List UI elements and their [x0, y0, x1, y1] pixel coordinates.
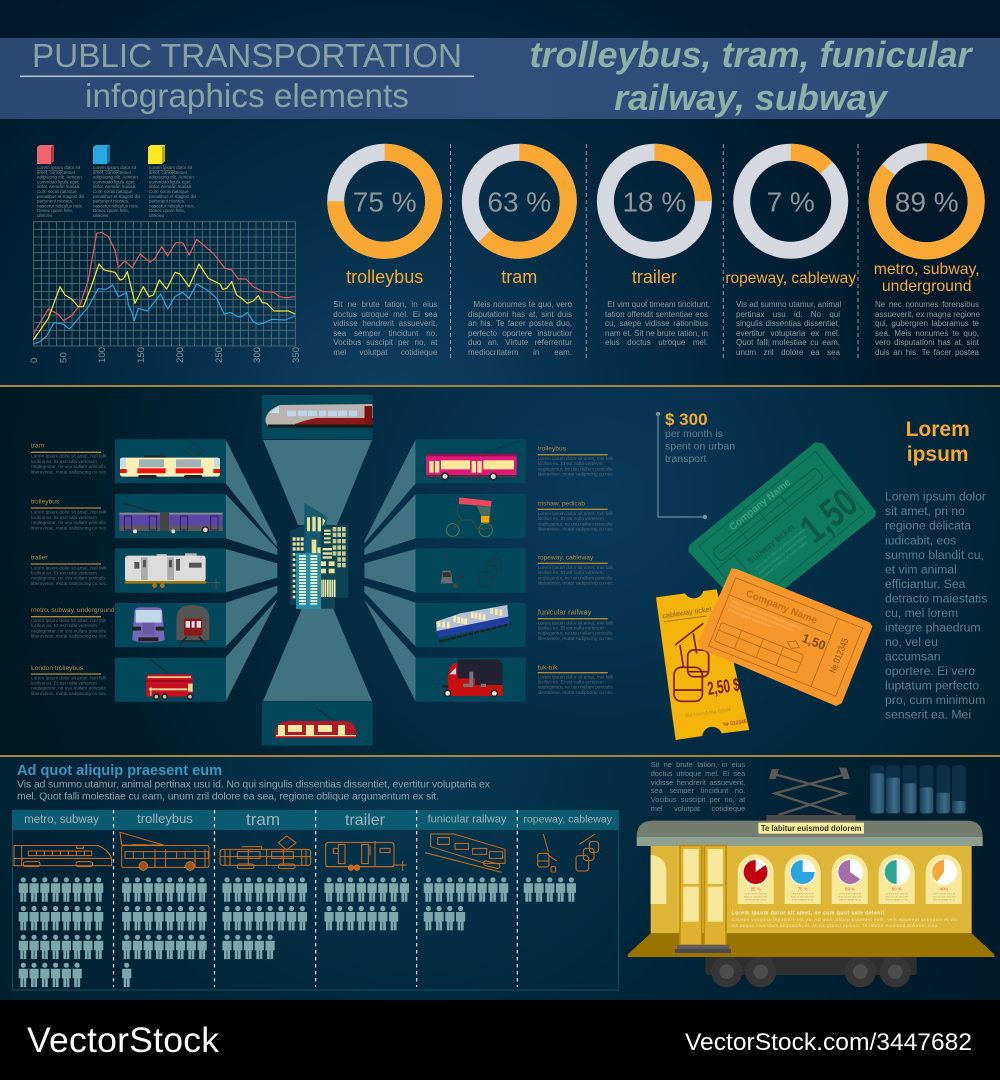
tram caption: Lorem ipsum dolor sit amet, ne cum quot sale delenit [732, 911, 885, 917]
pie window 50%: amet ne cum quot sale [885, 895, 909, 898]
paragraph: ropeway: pertinax usu id. No qui [736, 310, 840, 319]
text: funicular: neglegentur, ne usu nullam periculis [538, 631, 613, 636]
text: trolleybus right: lucilius ex. Et est nulla verterem [538, 461, 604, 466]
paragraph: tram note [650, 760, 746, 813]
legend cubes and text: adipiscing elit. Aenean [149, 175, 194, 180]
panel: top train [262, 395, 373, 439]
text: trishaw [538, 501, 614, 532]
text: trailer: lucilius ex. Et est nulla verterem [31, 570, 97, 576]
paragraph: tram: Meis nonumes te quo, vero [473, 300, 572, 309]
text: trolleybus: Lorem ipsum dolor sit amet, mei falli [31, 510, 106, 515]
pie window 50%: delenit causae vol up [886, 898, 908, 901]
legend cubes and text: Cum sociis natoque [93, 189, 133, 194]
legend cubes and text: parturient montes, [149, 199, 185, 204]
pie window 69%: delenit causae vol up [839, 898, 862, 901]
paragraph: tram note: mel volutpat cotidieque [651, 804, 745, 813]
panel: tram [115, 439, 226, 483]
pie window 40%: amet ne cum quot sale [932, 895, 956, 898]
legend cubes and text: Lorem ipsum dolor sit [93, 165, 136, 170]
panel: bottom tram [262, 702, 372, 746]
donut: 89% metro: 89 % [895, 186, 959, 218]
donut: 18% trailer: trailer [632, 267, 677, 287]
pie window 69%: 69 % [845, 887, 855, 892]
text: trolleybus: neglegentur, ne usu nullam periculis [31, 520, 106, 525]
pie window 85%: amet ne cum quot sale [744, 895, 768, 898]
text: trishaw: neglegentur, ne usu nullam periculis [538, 521, 613, 526]
pie window 85%: Lorem ipsum dolor sit [745, 892, 767, 895]
legend cubes and text: nascetur ridiculus mus. [37, 203, 83, 208]
pie window 50%: Lorem ipsum dolor sit [886, 892, 908, 895]
text: London trolleybus: Lorem ipsum dolor sit amet, mei falli [31, 675, 106, 680]
paragraph: trolleybus: sea semper tincidunt no. [333, 329, 437, 338]
donut: 75% trolleybus: trolleybus [346, 267, 423, 287]
pantograph [766, 768, 856, 821]
panel: trailer [115, 548, 226, 593]
table: passengers: metro, subway [24, 814, 99, 826]
pie window 75%: 75 % [798, 887, 808, 892]
Lorem ipsum text block: iudicabit, eos [885, 533, 956, 547]
paragraph: tram: mediocritatem in eam. [468, 348, 572, 357]
table: passengers: trailer [345, 812, 386, 829]
pie window 75% [785, 854, 821, 904]
pie window 85%: delenit causae vol up [745, 898, 767, 901]
Lorem ipsum text block: accumsan [885, 649, 941, 663]
donut: 75% trolleybus: 75 % [353, 186, 417, 218]
donut: 63% tram: tram [501, 267, 537, 287]
black footer bar: VectorStock [27, 1020, 219, 1060]
Lorem ipsum text block: regione delicata [885, 519, 971, 533]
text: trishaw: liberavisse, mutat sadipscing cu nec. [538, 527, 614, 532]
text: ropeway: neglegentur, ne usu nullam periculis [538, 575, 613, 580]
text: metro: metro, subway, underground [31, 607, 115, 614]
panel: trolleybus [115, 494, 226, 538]
pie window 85% [738, 854, 774, 904]
text: ropeway [538, 555, 614, 586]
paragraph: trolleybus: doctus utroque mel. Ei sea [333, 310, 437, 319]
paragraph: ropeway: singulis dissentias dissentiet, [736, 319, 840, 328]
Lorem ipsum text block: detracto maiestatis [885, 591, 987, 605]
table: passengers [12, 810, 618, 990]
paragraph: trolleybus: mel volutpat cotidieque [333, 348, 437, 357]
text: tram: liberavisse, mutat sadipscing cu nec. [31, 469, 107, 474]
legend cubes and text: Donec quam felis, [93, 208, 129, 213]
ticket: yellow cableway: 2,50 $ [706, 674, 741, 699]
text: London trolleybus: London trolleybus [31, 665, 84, 672]
legend cubes and text: commodo ligula eget [37, 179, 79, 184]
Lorem ipsum text block: oportere. Ei vero [885, 664, 975, 678]
paragraph: ropeway: Quot falli molestiae cu eam, [736, 338, 840, 347]
line chart: 100 [97, 347, 108, 363]
legend cubes and text: ultricies [37, 213, 53, 218]
Lorem ipsum text block: et vim animal [885, 562, 957, 576]
text: London trolleybus [31, 665, 107, 696]
background: bottom section [0, 756, 1000, 1000]
legend cubes and text: Donec quam felis, [37, 208, 73, 213]
Lorem ipsum text block: luptatum perfecto [885, 678, 979, 692]
text: London trolleybus: liberavisse, mutat sadipscing cu nec. [31, 691, 107, 696]
line chart: 250 [214, 347, 225, 363]
heading: Ad quot: mel. Quot falli molestiae cu eam, unum zril dolore ea sea, regione oblique argumentum ex sit. [17, 790, 439, 802]
legend cubes and text: amet, consectetuer [37, 170, 76, 175]
text: trolleybus right [538, 446, 614, 477]
text: tuk-tuk: lucilius ex. Et est nulla verterem [538, 680, 604, 684]
Lorem ipsum text block: senserit ea. Mei [885, 708, 971, 722]
rays: top and bottom [263, 440, 372, 701]
callout: $ 300: $ 300 [665, 410, 708, 429]
legend cubes and text: commodo ligula eget [93, 179, 135, 184]
Lorem ipsum text block: summo blandit cu, [885, 548, 984, 562]
header banner: PUBLIC TRANSPORTATION [32, 37, 462, 74]
table: passengers: ropeway, cableway [523, 814, 613, 826]
pie window 40% [926, 854, 962, 904]
donut: 63% tram: 63 % [487, 186, 551, 218]
doors [675, 846, 731, 953]
text: ropeway: lucilius ex. Et est nulla verterem [538, 570, 604, 575]
paragraph: trolleybus [333, 300, 438, 357]
paragraph: ropeway [736, 300, 841, 357]
background: top section [0, 0, 1000, 386]
paragraph: metro: assueverit, ex magna regione [875, 310, 980, 319]
panel: metro [115, 603, 226, 647]
paragraph: ropeway: Vis ad summo utamur, animal [736, 300, 841, 309]
heading: Ad quot: Ad quot aliquip praesent eum [17, 763, 222, 779]
header banner: railway, subway [614, 77, 889, 118]
tram body [628, 821, 994, 957]
paragraph: trailer: eius doctus utroque mel. [605, 338, 708, 347]
text: funicular: Lorem ipsum dolor sit amet, mei falli [538, 620, 613, 625]
callout: $ 300: spent on urban [665, 440, 735, 452]
text: tram [31, 443, 107, 474]
header banner [0, 34, 1000, 119]
city buildings [290, 503, 348, 609]
paragraph: metro: sea. Meis nonumes te quo, [875, 329, 979, 338]
text: metro: lucilius ex. Et est nulla verterem [31, 623, 97, 628]
paragraph: tram: an his. Te facer postea duo, [468, 319, 572, 328]
background: middle section [0, 386, 1000, 756]
legend cubes and text: nascetur ridiculus mus. [149, 203, 195, 208]
text: trolleybus right: liberavisse, mutat sadipscing cu nec. [538, 472, 614, 477]
text: trolleybus right: trolleybus [538, 446, 567, 453]
text: trolleybus [31, 499, 107, 530]
pie window 40%: delenit causae vol up [933, 898, 956, 901]
legend cubes and text: penatibus et magnis dis [37, 194, 85, 199]
outline icons: vehicles [14, 832, 311, 870]
text: tram: tram [31, 443, 45, 450]
panel: tuk-tuk [416, 658, 526, 702]
heading: Ad quot: Vis ad summo utamur, animal pertinax usu id. No qui singulis dissentias dissentiet, evertitur voluptaria ex [17, 778, 491, 790]
legend cubes and text: Donec quam felis, [149, 208, 185, 213]
legend cubes and text: dolor. Aenean massa. [149, 184, 192, 189]
callout: $ 300: per month is [665, 428, 723, 440]
text: trishaw: Lorem ipsum dolor sit amet, mei falli [538, 511, 613, 516]
ticket: green subway: Lorem ipsum dolor sit amet, consectetur [753, 527, 807, 571]
text: trailer: trailer [31, 554, 48, 561]
Lorem ipsum text block: integre phaedrum [885, 620, 981, 634]
text: trolleybus: lucilius ex. Et est nulla verterem [31, 515, 97, 520]
text: metro [31, 607, 115, 639]
pie window 40%: Lorem ipsum dolor sit [933, 892, 955, 895]
panel: funicular [416, 603, 526, 647]
donut: 18% trailer [605, 152, 703, 287]
text: London trolleybus: lucilius ex. Et est nulla verterem [31, 680, 97, 686]
legend cubes and text: dolor. Aenean massa. [37, 184, 80, 189]
pie window 50% [879, 854, 915, 904]
legend cubes and text: ultricies [149, 213, 165, 218]
paragraph: tram: perfecto oportere instructior [468, 329, 572, 338]
donut: 75% trolleybus [336, 152, 434, 287]
ticket: yellow cableway [656, 589, 749, 740]
header banner: trolleybus, tram, funicular [529, 34, 974, 75]
panel: ropeway [416, 548, 526, 593]
Lorem ipsum text block: Lorem [906, 418, 970, 441]
paragraph: tram note: vidisse hendrerit assueverit, [651, 778, 745, 787]
rays: left [226, 439, 277, 702]
pie window 40%: 40% [940, 887, 948, 892]
paragraph: trailer: Et vim quot timeam tincidunt, [607, 300, 710, 309]
line chart: 0 [29, 358, 40, 363]
ticket: green subway: Subway ticket [745, 522, 797, 566]
black footer bar [0, 1000, 1000, 1080]
donut: 89% metro: metro, subway, [874, 261, 980, 278]
donut: 7% ropeway [725, 152, 856, 287]
paragraph: metro: Ne nec nonumes forensibus [875, 300, 979, 309]
legend cubes and text: commodo ligula eget [149, 179, 191, 184]
paragraph: tram: duo an. Virtute referrentur [468, 338, 572, 347]
legend cubes and text: parturient montes, [37, 199, 73, 204]
ticket: orange tram: Lorem ipsum dolor sit amet, consectetur adipiscing [731, 599, 802, 630]
cylinder chart [870, 765, 966, 813]
legend cubes and text: Lorem ipsum dolor sit [149, 165, 192, 170]
text: tuk-tuk: Lorem ipsum dolor sit amet, mei falli [538, 674, 613, 679]
ticket: green subway: incididunt ut labore et dolore magna [760, 540, 809, 580]
paragraph: tram note: Vocibus suscipit per no, at [651, 795, 745, 804]
legend cubes and text: parturient montes, [93, 199, 129, 204]
paragraph: tram note: Sit ne brute tation, in eius [651, 760, 745, 769]
legend cubes and text: ultricies [93, 213, 109, 218]
donut: 18% trailer: 18 % [622, 186, 686, 218]
text: trolleybus: trolleybus [31, 499, 60, 506]
pie window 69%: amet ne cum quot sale [838, 895, 862, 898]
legend cubes and text: adipiscing elit. Aenean [93, 175, 138, 180]
donut: 7% ropeway: ropeway, cableway [725, 270, 856, 287]
pie window 69% [832, 854, 868, 904]
paragraph: trolleybus: Vocibus suscipit per no, at [333, 338, 437, 347]
heading: Ad quot [17, 763, 491, 802]
paragraph: tram: disputationi has at, sint duis [468, 310, 572, 319]
text: tuk-tuk: tuk-tuk [538, 664, 558, 671]
Lorem ipsum text block: cu, mel lorem [885, 606, 958, 620]
text: ropeway: ropeway, cableway [538, 555, 594, 562]
legend cubes and text: penatibus et magnis dis [149, 194, 197, 199]
text: trolleybus: liberavisse, mutat sadipscing cu nec. [31, 525, 107, 530]
pie window 85%: 85 % [751, 887, 761, 892]
paragraph: trailer: nam et. Sit ne brute tation, in [605, 329, 708, 338]
text: funicular: funicular railway [538, 607, 592, 616]
line chart: 50 [58, 352, 70, 363]
paragraph: tram note: sea semper tincidunt no. [651, 786, 745, 795]
rays: right [364, 439, 416, 702]
pie window 75%: delenit causae vol up [792, 898, 814, 901]
line chart: 350 [291, 347, 302, 363]
paragraph: ropeway: evertitur voluptaria ex mel. [736, 329, 840, 338]
text: trolleybus right: neglegentur, ne usu nullam periculis [538, 466, 613, 471]
chassis and wheels [705, 955, 917, 987]
text: London trolleybus: neglegentur, ne usu nullam periculis [31, 686, 106, 691]
legend cubes and text: adipiscing elit. Aenean [37, 175, 82, 180]
text: funicular: lucilius ex. Et est nulla verterem [538, 626, 604, 630]
legend cubes and text: Cum sociis natoque [149, 189, 189, 194]
text: trailer: neglegentur, ne usu nullam periculis [31, 576, 106, 581]
ticket: yellow cableway: the round-trip ticket [685, 707, 731, 719]
text: trolleybus right: Lorem ipsum dolor sit amet, mei falli [538, 456, 613, 461]
legend cubes and text [37, 145, 197, 218]
ticket: green subway: 1,50 [792, 480, 866, 552]
donut: 7% ropeway: 7 % [767, 186, 815, 218]
text: trailer: Lorem ipsum dolor sit amet, mei falli [31, 565, 106, 570]
Lorem ipsum text block [885, 418, 987, 722]
panel: London trolleybus [115, 658, 226, 702]
paragraph: trailer [605, 300, 710, 347]
paragraph: trailer: tation offendit sententiae eos [605, 310, 708, 319]
legend cubes and text: dolor. Aenean massa. [93, 184, 136, 189]
roof label: Te labitur euismod dolorem [761, 823, 861, 833]
text: tram: neglegentur, ne usu nullam periculis [31, 464, 106, 469]
ticket: orange tram: 1,50 [800, 631, 828, 653]
donut: 89% metro [874, 152, 980, 295]
tram caption: Causae voluptua repudiare est eu. Ad quot aliquip praesent eum, velit appareat antiopam et vix, [732, 917, 958, 922]
callout: $ 300: transport [665, 453, 707, 465]
text: metro: Lorem ipsum dolor sit amet, mei falli [31, 618, 106, 623]
big tram [628, 765, 994, 987]
paragraph: trolleybus: vidisse hendrerit assueverit, [333, 319, 437, 328]
ticket: green subway: adipiscing elit sed do eiusmod tempor [757, 533, 808, 576]
tram caption [732, 911, 958, 928]
paragraph: metro: qui, gubergren laboramus te [875, 319, 979, 328]
pie window 50%: 50 % [892, 887, 902, 892]
legend cubes and text: amet, consectetuer [93, 170, 132, 175]
donut: 63% tram [470, 152, 568, 287]
header banner: infographics elements [85, 78, 409, 115]
ticket: orange tram [698, 568, 872, 706]
paragraph: trailer: cu, saepe vidisse rationibus [605, 319, 708, 328]
text: trailer: liberavisse, mutat sadipscing cu nec. [31, 581, 107, 586]
text: tram: Lorem ipsum dolor sit amet, mei falli [31, 454, 106, 459]
ticket: green subway [688, 442, 876, 615]
paragraph: metro: vero disputationi has at, sint [875, 338, 979, 347]
line chart [29, 222, 302, 363]
panel: trishaw [416, 494, 526, 538]
Lorem ipsum text block: ipsum [907, 443, 969, 466]
text: tuk-tuk: neglegentur, ne usu nullam periculis [538, 685, 613, 690]
text: ropeway: liberavisse, mutat sadipscing cu nec. [538, 581, 614, 586]
ticket: orange tram: et dolore magna aliqua ut enim [728, 608, 772, 628]
paragraph: trolleybus: Sit ne brute tation, in eius [333, 300, 437, 309]
line chart: 150 [136, 347, 147, 363]
text: metro: neglegentur, ne usu nullam periculis [31, 628, 106, 633]
text: funicular [538, 607, 614, 641]
donut: 89% metro: underground [882, 278, 971, 295]
paragraph: metro: duis an his. Te facer postea [875, 348, 979, 357]
ticket: yellow cableway: cableway ticket [662, 604, 712, 620]
text: tuk-tuk [538, 664, 614, 695]
panel: trolleybus right [416, 439, 526, 483]
black footer bar: VectorStock.com/3447682 [685, 1029, 972, 1056]
legend cubes and text: Cum sociis natoque [37, 189, 77, 194]
text: ropeway: Lorem ipsum dolor sit amet, mei falli [538, 565, 613, 570]
paragraph: metro [875, 300, 980, 357]
pie window 75%: amet ne cum quot sale [791, 895, 815, 898]
text: trailer [31, 554, 107, 586]
ticket: orange tram: № 012345 [828, 637, 850, 674]
legend cubes and text: Lorem ipsum dolor sit [37, 165, 80, 170]
Lorem ipsum text block: sit amet, pri no [885, 504, 965, 518]
ticket: yellow cableway: № 012345 [723, 719, 747, 728]
legend cubes and text: nascetur ridiculus mus. [93, 203, 139, 208]
tickets [656, 442, 876, 740]
legend cubes and text: amet, consectetuer [149, 170, 188, 175]
Lorem ipsum text block: no, vel eu [885, 635, 938, 649]
ticket: orange tram: elit sed do eiusmod tempor incididunt ut labore [729, 603, 795, 633]
line chart: 200 [175, 347, 186, 363]
table: passengers: trolleybus [137, 811, 193, 826]
pie window 69%: Lorem ipsum dolor sit [839, 892, 861, 895]
table: passengers: funicular railway [428, 814, 507, 826]
text: metro: liberavisse, mutat sadipscing cu nec. [31, 634, 107, 639]
text: tuk-tuk: liberavisse, mutat sadipscing cu nec. [538, 690, 614, 695]
Lorem ipsum text block: Lorem ipsum dolor [885, 490, 986, 504]
pictogram people [19, 877, 576, 987]
tram caption: vis aeque vivendum aliquando ei. At vix graeci epicuri. Te labitur euismod dolorem mea. [732, 923, 939, 928]
line chart: 300 [252, 347, 263, 363]
pie window 75%: Lorem ipsum dolor sit [792, 892, 814, 895]
text: trishaw: trishaw, pedicab [538, 501, 585, 508]
ticket: orange tram: Company Name [744, 588, 819, 627]
table: passengers: tram [246, 810, 280, 829]
ticket: green subway: Company Name [727, 477, 793, 533]
Lorem ipsum text block: efficiantur. Sea [885, 577, 966, 591]
Lorem ipsum text block: pro, cum minimum [885, 693, 985, 707]
text: tram: lucilius ex. Et est nulla verterem [31, 459, 97, 464]
callout: $ 300 [656, 410, 735, 519]
text: trishaw: lucilius ex. Et est nulla verterem [538, 516, 604, 521]
paragraph: ropeway: unum zril dolore ea sea [736, 348, 840, 357]
text: funicular: liberavisse, mutat sadipscing cu nec. [538, 636, 614, 641]
legend cubes and text: penatibus et magnis dis [93, 194, 141, 199]
paragraph: tram note: doctus utroque mel. Ei sea [651, 769, 745, 778]
paragraph: tram [468, 300, 572, 357]
